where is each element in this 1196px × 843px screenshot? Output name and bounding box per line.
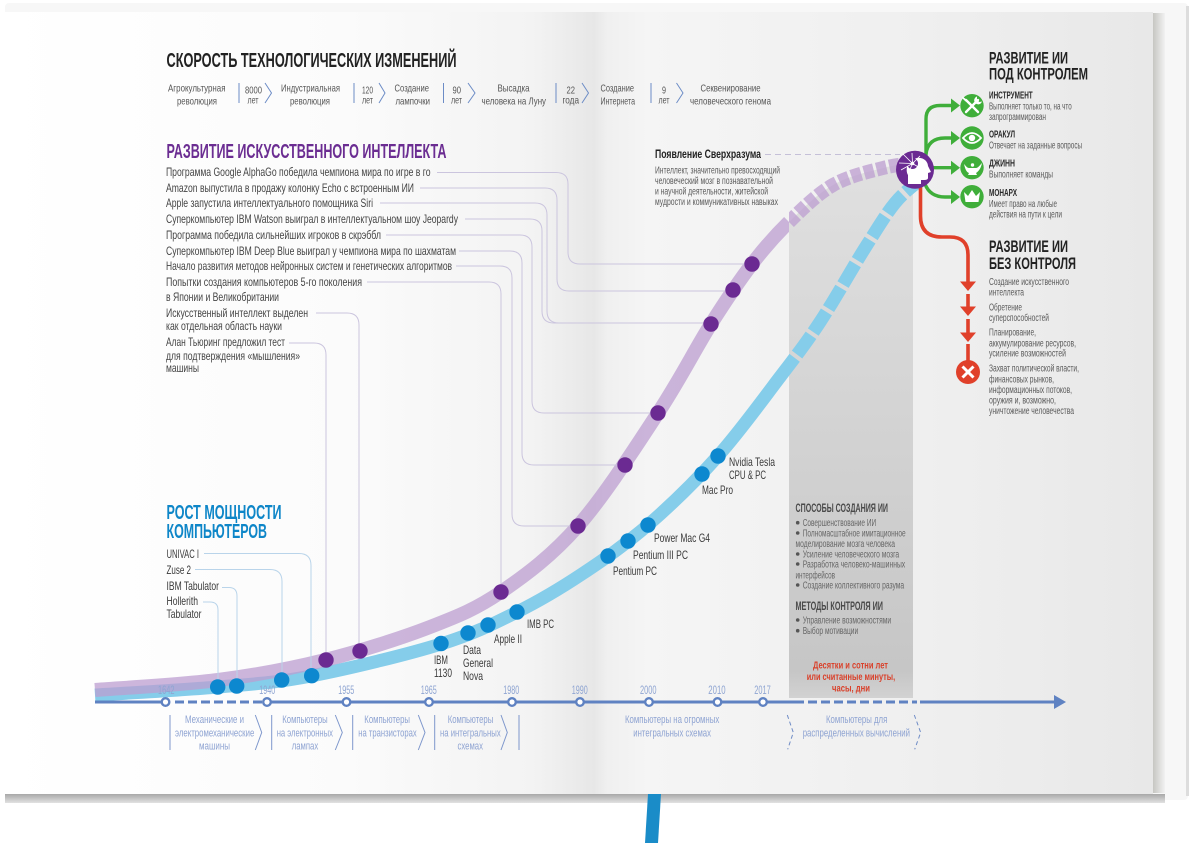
panel: uncontrolled AI development: аккумулирование ресурсов,: [989, 338, 1076, 350]
list of AI milestones: Суперкомпьютер IBM Watson выиграл в интеллектуальном шоу Jeopardy: [166, 212, 458, 226]
timeline of technological milestones: лет: [248, 94, 259, 106]
blue curve: computing power: [95, 180, 920, 695]
panel: uncontrolled AI development: Планирование,: [989, 328, 1036, 338]
list of AI milestones: Программа победила сильнейших игроков в скрэббл: [166, 228, 381, 242]
purple milestone dots: [318, 256, 760, 668]
computer generations under the axis: на транзисторах: [358, 728, 417, 740]
early computers list: Hollerith: [166, 594, 198, 608]
time axis with year markers: 1990: [572, 683, 588, 697]
panel: uncontrolled AI development: Создание искусственного: [989, 277, 1069, 288]
text in grey panel: ways to create AI: или считанные минуты,: [807, 671, 895, 683]
panel: controlled AI development: ИНСТРУМЕНТ: [989, 90, 1033, 102]
list of AI milestones: для подтверждения «мышления»: [166, 349, 300, 363]
panel: uncontrolled AI development: РАЗВИТИЕ ИИ: [989, 237, 1068, 256]
time axis with year markers: 1642: [158, 683, 175, 697]
early computers list: Zuse 2: [166, 563, 191, 577]
timeline of technological milestones: революция: [290, 96, 330, 108]
panel: uncontrolled AI development: [989, 237, 1079, 417]
bookmark ribbon: [645, 794, 661, 843]
icon: tool: [960, 94, 984, 117]
panel: controlled AI development: Имеет право на любые: [989, 198, 1057, 210]
list of AI milestones: как отдельная область науки: [166, 319, 282, 333]
computer generations under the axis: Компьютеры: [282, 714, 328, 726]
panel: uncontrolled AI development: оружия и, возможно,: [989, 396, 1056, 406]
computer model labels: Mac Pro: [702, 483, 733, 497]
computer model labels: Nova: [463, 669, 483, 683]
superintelligence note: [655, 147, 900, 208]
computer generations under the axis: лампах: [292, 740, 319, 752]
text in grey panel: ways to create AI: моделирование мозга человека: [796, 539, 895, 550]
panel: uncontrolled AI development: уничтожение человечества: [989, 406, 1074, 417]
computer generations under the axis: [170, 714, 921, 752]
list of AI milestones: Программа Google AlphaGo победила чемпиона мира по игре в го: [166, 165, 431, 179]
timeline of technological milestones: [168, 82, 771, 108]
text in grey panel: ways to create AI: Создание коллективного разума: [803, 580, 904, 592]
timeline of technological milestones: лет: [362, 94, 373, 106]
panel: controlled AI development: РАЗВИТИЕ ИИ: [989, 48, 1068, 68]
leader lines for early computers: [195, 554, 311, 681]
computer model labels: Pentium III PC: [633, 548, 688, 562]
list of AI milestones: в Японии и Великобритании: [166, 290, 279, 304]
blue computer dots: [210, 448, 726, 695]
time axis with year markers: 1955: [338, 683, 354, 697]
leader lines for AI milestones: [289, 172, 745, 653]
early computers list: Tabulator: [166, 607, 202, 621]
computer model labels: Pentium PC: [613, 564, 657, 578]
superintelligence note: мудрости и коммуникативных навыках: [655, 197, 778, 208]
green arrows: controlled AI paths: [925, 98, 960, 204]
time axis with year markers: 2000: [640, 683, 657, 697]
computer generations under the axis: на интегральных: [440, 728, 501, 740]
timeline of technological milestones: Создание: [394, 82, 429, 94]
time axis with year markers: 2010: [708, 683, 726, 697]
computer generations under the axis: распределенных вычислений: [803, 728, 910, 740]
computer generations under the axis: на электронных: [277, 728, 333, 740]
title: speed of technological change: СКОРОСТЬ ТЕХНОЛОГИЧЕСКИХ ИЗМЕНЕНИЙ: [166, 48, 456, 72]
timeline of technological milestones: человека на Луну: [482, 96, 547, 108]
timeline of technological milestones: 90: [452, 84, 461, 96]
list of AI milestones: Amazon выпустила в продажу колонку Echo с встроенным ИИ: [166, 181, 414, 195]
heading: growth of computing power: [166, 502, 282, 543]
time axis with year markers: 1980: [503, 683, 519, 697]
computer model labels: Power Mac G4: [654, 531, 710, 545]
text in grey panel: ways to create AI: Полномасштабное имитационное: [803, 528, 906, 540]
icon: oracle eye: [960, 126, 984, 150]
text in grey panel: ways to create AI: Выбор мотивации: [803, 625, 858, 637]
list of AI milestones: Искусственный интеллект выделен: [166, 306, 308, 320]
text in grey panel: ways to create AI: Разработка человеко-машинных: [803, 558, 905, 570]
computer model labels: 1130: [434, 666, 452, 680]
panel: controlled AI development: ОРАКУЛ: [989, 128, 1015, 140]
computer generations under the axis: Компьютеры для: [826, 714, 887, 726]
panel: uncontrolled AI development: БЕЗ КОНТРОЛЯ: [989, 254, 1076, 273]
list of AI milestones: машины: [166, 361, 199, 375]
panel: uncontrolled AI development: интеллекта: [989, 288, 1024, 298]
panel: uncontrolled AI development: суперспособностей: [989, 312, 1049, 324]
timeline of technological milestones: 8000: [245, 84, 262, 96]
heading: growth of computing power: КОМПЬЮТЕРОВ: [166, 521, 267, 543]
computer model labels: General: [463, 656, 493, 670]
superintelligence note: и научной деятельности, житейской: [655, 186, 768, 198]
icon: genie lamp: [960, 156, 984, 179]
grey future zone panel: [789, 164, 913, 698]
computer generations under the axis: интегральных схемах: [633, 728, 711, 740]
timeline of technological milestones: 120: [362, 84, 373, 96]
time axis with year markers: [95, 683, 1066, 709]
timeline of technological milestones: Высадка: [498, 82, 530, 94]
panel: controlled AI development: МОНАРХ: [989, 187, 1017, 199]
icon: superintelligence head: [896, 151, 934, 189]
time axis with year markers: 1965: [421, 683, 437, 697]
early computers list: UNIVAC I: [166, 547, 199, 561]
panel: controlled AI development: ДЖИНН: [989, 158, 1015, 170]
timeline of technological milestones: Индустриальная: [281, 82, 340, 94]
text in grey panel: ways to create AI: МЕТОДЫ КОНТРОЛЯ ИИ: [796, 601, 883, 613]
early computers list: IBM Tabulator: [166, 579, 219, 593]
computer generations under the axis: Механические и: [185, 714, 244, 726]
panel: uncontrolled AI development: информационных потоков,: [989, 384, 1072, 396]
panel: uncontrolled AI development: финансовых рынков,: [989, 374, 1054, 386]
text in grey panel: ways to create AI: [796, 503, 906, 694]
time axis with year markers: 2017: [754, 683, 771, 697]
panel: controlled AI development: действия на пути к цели: [989, 210, 1062, 220]
timeline of technological milestones: революция: [177, 96, 217, 108]
list of AI milestones: Попытки создания компьютеров 5-го поколения: [166, 275, 362, 289]
purple curve: AI development: [95, 164, 915, 690]
timeline of technological milestones: человеческого генома: [690, 96, 771, 108]
timeline of technological milestones: года: [562, 94, 579, 106]
computer model labels: CPU & PC: [729, 468, 766, 482]
superintelligence note: Интеллект, значительно превосходящий: [655, 166, 780, 176]
time axis with year markers: 1940: [259, 683, 275, 697]
list of AI milestones: [166, 165, 458, 375]
text in grey panel: ways to create AI: СПОСОБЫ СОЗДАНИЯ ИИ: [796, 503, 888, 515]
computer generations under the axis: Компьютеры: [364, 714, 410, 726]
panel: controlled AI development: Отвечает на заданные вопросы: [989, 140, 1082, 152]
heading: growth of computing power: РОСТ МОЩНОСТИ: [166, 502, 282, 524]
computer generations under the axis: машины: [199, 740, 230, 752]
panel: uncontrolled AI development: Захват политической власти,: [989, 364, 1079, 374]
timeline of technological milestones: 22: [566, 84, 575, 96]
computer model labels: [434, 455, 775, 683]
timeline of technological milestones: Агрокультурная: [168, 82, 226, 94]
list of AI milestones: Начало развития методов нейронных систем и генетических алгоритмов: [166, 259, 452, 273]
panel: controlled AI development: Выполняет только то, на что: [989, 102, 1072, 112]
text in grey panel: ways to create AI: интерфейсов: [796, 570, 835, 582]
computer generations under the axis: Компьютеры: [448, 714, 493, 726]
heading: AI development: РАЗВИТИЕ ИСКУССТВЕННОГО ИНТЕЛЛЕКТА: [166, 141, 446, 163]
superintelligence note: Появление Сверхразума: [655, 147, 761, 161]
superintelligence note: человеческий мозг в познавательной: [655, 176, 773, 187]
text in grey panel: ways to create AI: Десятки и сотни лет: [813, 660, 888, 672]
early computers list: [166, 547, 219, 621]
red arrows: uncontrolled AI path: [920, 186, 976, 362]
panel: controlled AI development: запрограммирован: [989, 112, 1046, 123]
computer model labels: Apple II: [494, 632, 522, 646]
text in grey panel: ways to create AI: часы, дни: [832, 682, 870, 694]
timeline of technological milestones: Создание: [600, 82, 634, 94]
timeline of technological milestones: 9: [662, 84, 666, 96]
computer generations under the axis: электромеханические: [175, 728, 254, 740]
panel: uncontrolled AI development: Обретение: [989, 302, 1022, 314]
list of AI milestones: Суперкомпьютер IBM Deep Blue выиграл у чемпиона мира по шахматам: [166, 244, 456, 258]
panel: controlled AI development: Выполняет команды: [989, 170, 1053, 180]
list of AI milestones: Алан Тьюринг предложил тест: [166, 335, 285, 349]
computer model labels: Data: [463, 643, 481, 657]
text in grey panel: ways to create AI: Управление возможностями: [803, 616, 891, 626]
computer model labels: Nvidia Tesla: [729, 455, 775, 469]
text in grey panel: ways to create AI: Усиление человеческого мозга: [803, 550, 899, 560]
panel: uncontrolled AI development: усиление возможностей: [989, 348, 1066, 360]
timeline of technological milestones: лампочки: [396, 96, 430, 108]
list of AI milestones: Apple запустила интеллектуального помощника Siri: [166, 196, 373, 210]
icon: annihilation cross: [956, 360, 980, 384]
computer model labels: IMB PC: [527, 617, 554, 631]
timeline of technological milestones: Секвенирование: [700, 82, 761, 94]
computer model labels: IBM: [434, 653, 448, 667]
timeline of technological milestones: лет: [658, 94, 670, 106]
text in grey panel: ways to create AI: Совершенствование ИИ: [803, 518, 876, 529]
panel: controlled AI development: ПОД КОНТРОЛЕМ: [989, 64, 1088, 84]
icon: monarch crown: [960, 185, 984, 208]
timeline of technological milestones: Интернета: [600, 96, 635, 108]
computer generations under the axis: Компьютеры на огромных: [625, 714, 720, 726]
computer generations under the axis: схемах: [458, 740, 483, 752]
panel: controlled AI development: [989, 48, 1088, 220]
timeline of technological milestones: лет: [451, 94, 462, 106]
